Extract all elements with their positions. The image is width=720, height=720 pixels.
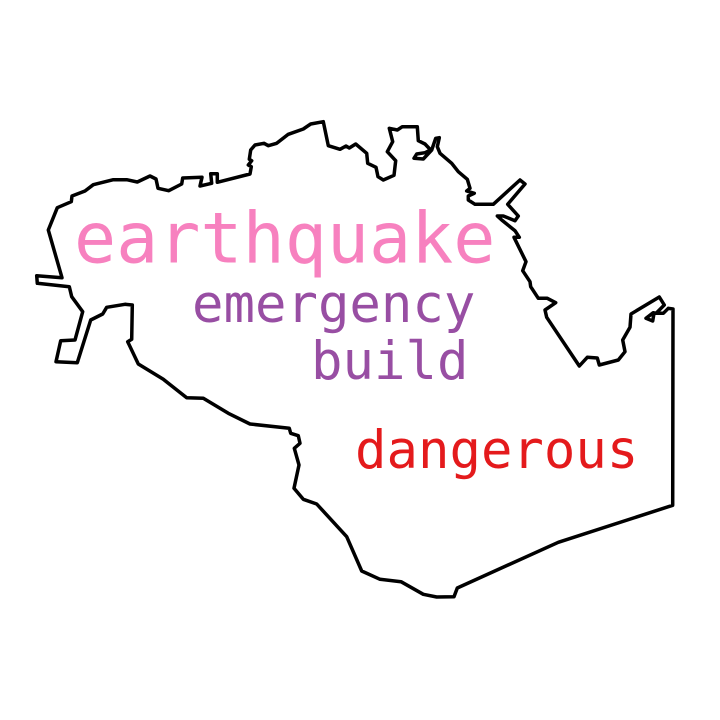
word: emergency: emergency xyxy=(192,274,475,335)
map outline xyxy=(37,122,673,597)
word: build: build xyxy=(311,331,468,392)
word: earthquake: earthquake xyxy=(74,198,495,280)
word: dangerous: dangerous xyxy=(355,420,638,481)
